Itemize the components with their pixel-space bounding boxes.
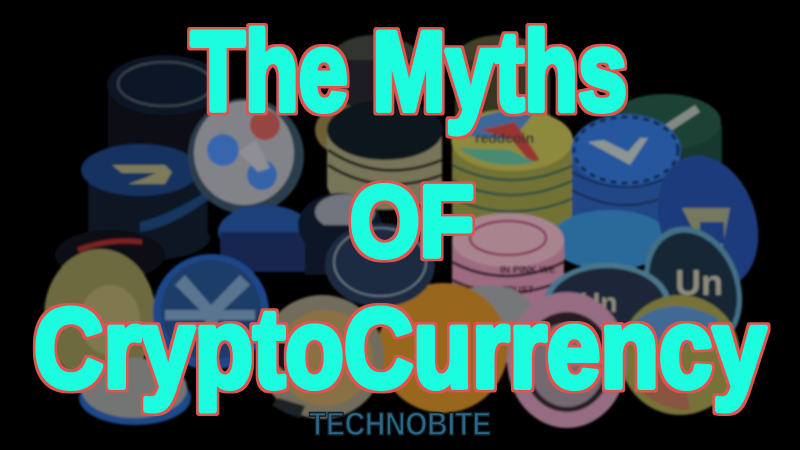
coin: gold poker chip	[260, 295, 384, 419]
coin labels: Un	[675, 262, 723, 303]
coin stack: bitcoin	[315, 100, 443, 210]
coin stack: dash	[81, 144, 210, 260]
coin: red topped dark stack	[55, 230, 165, 280]
coin: orange	[378, 283, 508, 413]
title line 1: The Myths	[191, 9, 627, 134]
coin pile	[44, 35, 775, 428]
coin labels: Un	[580, 287, 617, 318]
coin: blue Y	[153, 254, 269, 370]
coin: dash tilted	[641, 142, 775, 302]
logo: TECHNOBITE: TECHNOBITE	[309, 406, 491, 442]
coin: doge	[44, 249, 156, 383]
coin labels	[455, 130, 723, 318]
coin: pink poker chip	[507, 292, 627, 428]
coin: ripple	[188, 98, 304, 214]
coin labels: IN PINK WE	[500, 265, 556, 276]
coin: Un right	[627, 213, 759, 363]
coin labels: reddcoin	[475, 130, 534, 146]
coin: white behind	[440, 285, 540, 365]
coin stack: top centre behind title	[330, 35, 550, 120]
title line 2: OF	[350, 166, 474, 278]
coin stack: blue centre	[218, 193, 382, 275]
coin stack: reddcoin	[451, 109, 574, 246]
coin: colourful	[620, 295, 740, 415]
coin stack: dark top left	[107, 55, 223, 172]
coin stack: blue dotted	[571, 114, 681, 240]
coin stack: pink and light blue	[452, 210, 670, 320]
coin: Un lower	[543, 263, 671, 347]
coin labels: PINK WE TRUST	[455, 285, 534, 296]
coin stack: green	[609, 94, 722, 200]
coin: nebulas	[325, 223, 435, 307]
coin: siberian chervonets	[79, 358, 191, 425]
